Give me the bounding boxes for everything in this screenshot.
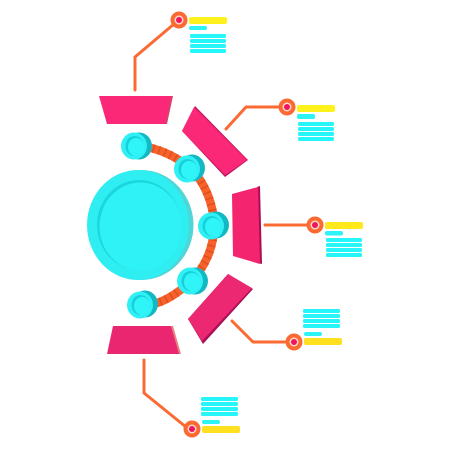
text block: top bbox=[189, 17, 227, 53]
text block: bottom bbox=[201, 397, 240, 433]
marker: middle right bbox=[306, 216, 324, 234]
marker: upper right bbox=[278, 98, 296, 116]
panel: middle right trapezoid bbox=[232, 186, 262, 264]
panel: bottom trapezoid bbox=[107, 326, 181, 354]
text block: upper right bbox=[297, 105, 335, 141]
marker: top bbox=[170, 12, 188, 28]
small disc 2 bbox=[174, 154, 205, 182]
marker: lower right bbox=[286, 334, 302, 350]
small disc 4 bbox=[177, 268, 208, 294]
panel: upper right trapezoid bbox=[182, 106, 248, 177]
marker: bottom bbox=[184, 420, 200, 438]
panel: top trapezoid bbox=[99, 96, 173, 124]
large central disc bbox=[87, 170, 194, 280]
small disc 5 bbox=[127, 290, 158, 318]
panel: lower right trapezoid bbox=[188, 274, 253, 344]
leader lines bbox=[135, 24, 309, 427]
small disc 3 bbox=[198, 212, 229, 240]
text block: middle right bbox=[325, 222, 363, 257]
small disc 1 bbox=[121, 132, 152, 160]
text block: lower right bbox=[303, 309, 342, 345]
rope connecting discs bbox=[147, 147, 214, 305]
